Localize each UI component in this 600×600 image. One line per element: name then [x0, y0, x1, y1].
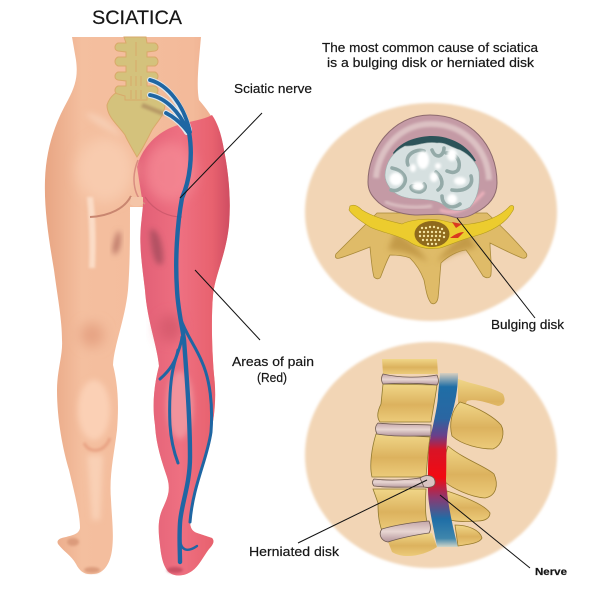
- title: SCIATICA: [92, 7, 182, 29]
- yellow nerve root arch: [349, 205, 514, 249]
- herniated bulge: [420, 476, 435, 487]
- leader lines: [180, 113, 535, 568]
- body skin: [45, 37, 230, 575]
- label: areas of pain: (Red): [257, 370, 287, 385]
- figure: back of body with legs: [45, 37, 230, 575]
- sacrum mark: [141, 103, 165, 116]
- label: herniated disk: Herniated disk: [249, 544, 340, 559]
- facet bones: [444, 379, 505, 546]
- intervertebral disks: [372, 374, 438, 542]
- spine centre lines: [131, 42, 141, 99]
- sciatic nerve: [150, 80, 212, 562]
- disk outer ring: [368, 115, 497, 218]
- nerve column: [428, 373, 458, 547]
- caption: common cause: The most common cause of sciatica: [322, 40, 539, 55]
- panel: bulging disk circle: [305, 103, 557, 321]
- nucleus lobes: [391, 148, 472, 207]
- caption: common cause: [322, 40, 539, 70]
- label: nerve: Nerve: [535, 567, 567, 578]
- label: areas of pain: Areas of pain: [232, 354, 314, 369]
- circle background: [305, 342, 557, 568]
- disk nucleus dark crescent: [393, 136, 476, 165]
- vertebra bodies: [371, 359, 438, 556]
- panel: herniated disk circle: [305, 342, 557, 568]
- circle background: [305, 103, 557, 321]
- pain area: red leg: [137, 115, 230, 575]
- bone shading: [388, 232, 476, 262]
- label: bulging disk: Bulging disk: [491, 317, 565, 332]
- vertebra bone: [335, 213, 527, 304]
- red nerve compression: [450, 222, 464, 238]
- calves: [67, 314, 193, 573]
- spine and sacrum: [107, 37, 165, 157]
- disk nucleus: [385, 143, 479, 210]
- spinal cord: [414, 221, 450, 247]
- glute shading and highlights: [77, 113, 196, 268]
- label: areas of pain: [232, 354, 314, 385]
- label: sciatic nerve: Sciatic nerve: [234, 81, 312, 96]
- caption: common cause: is a bulging disk or herniated disk: [327, 55, 535, 70]
